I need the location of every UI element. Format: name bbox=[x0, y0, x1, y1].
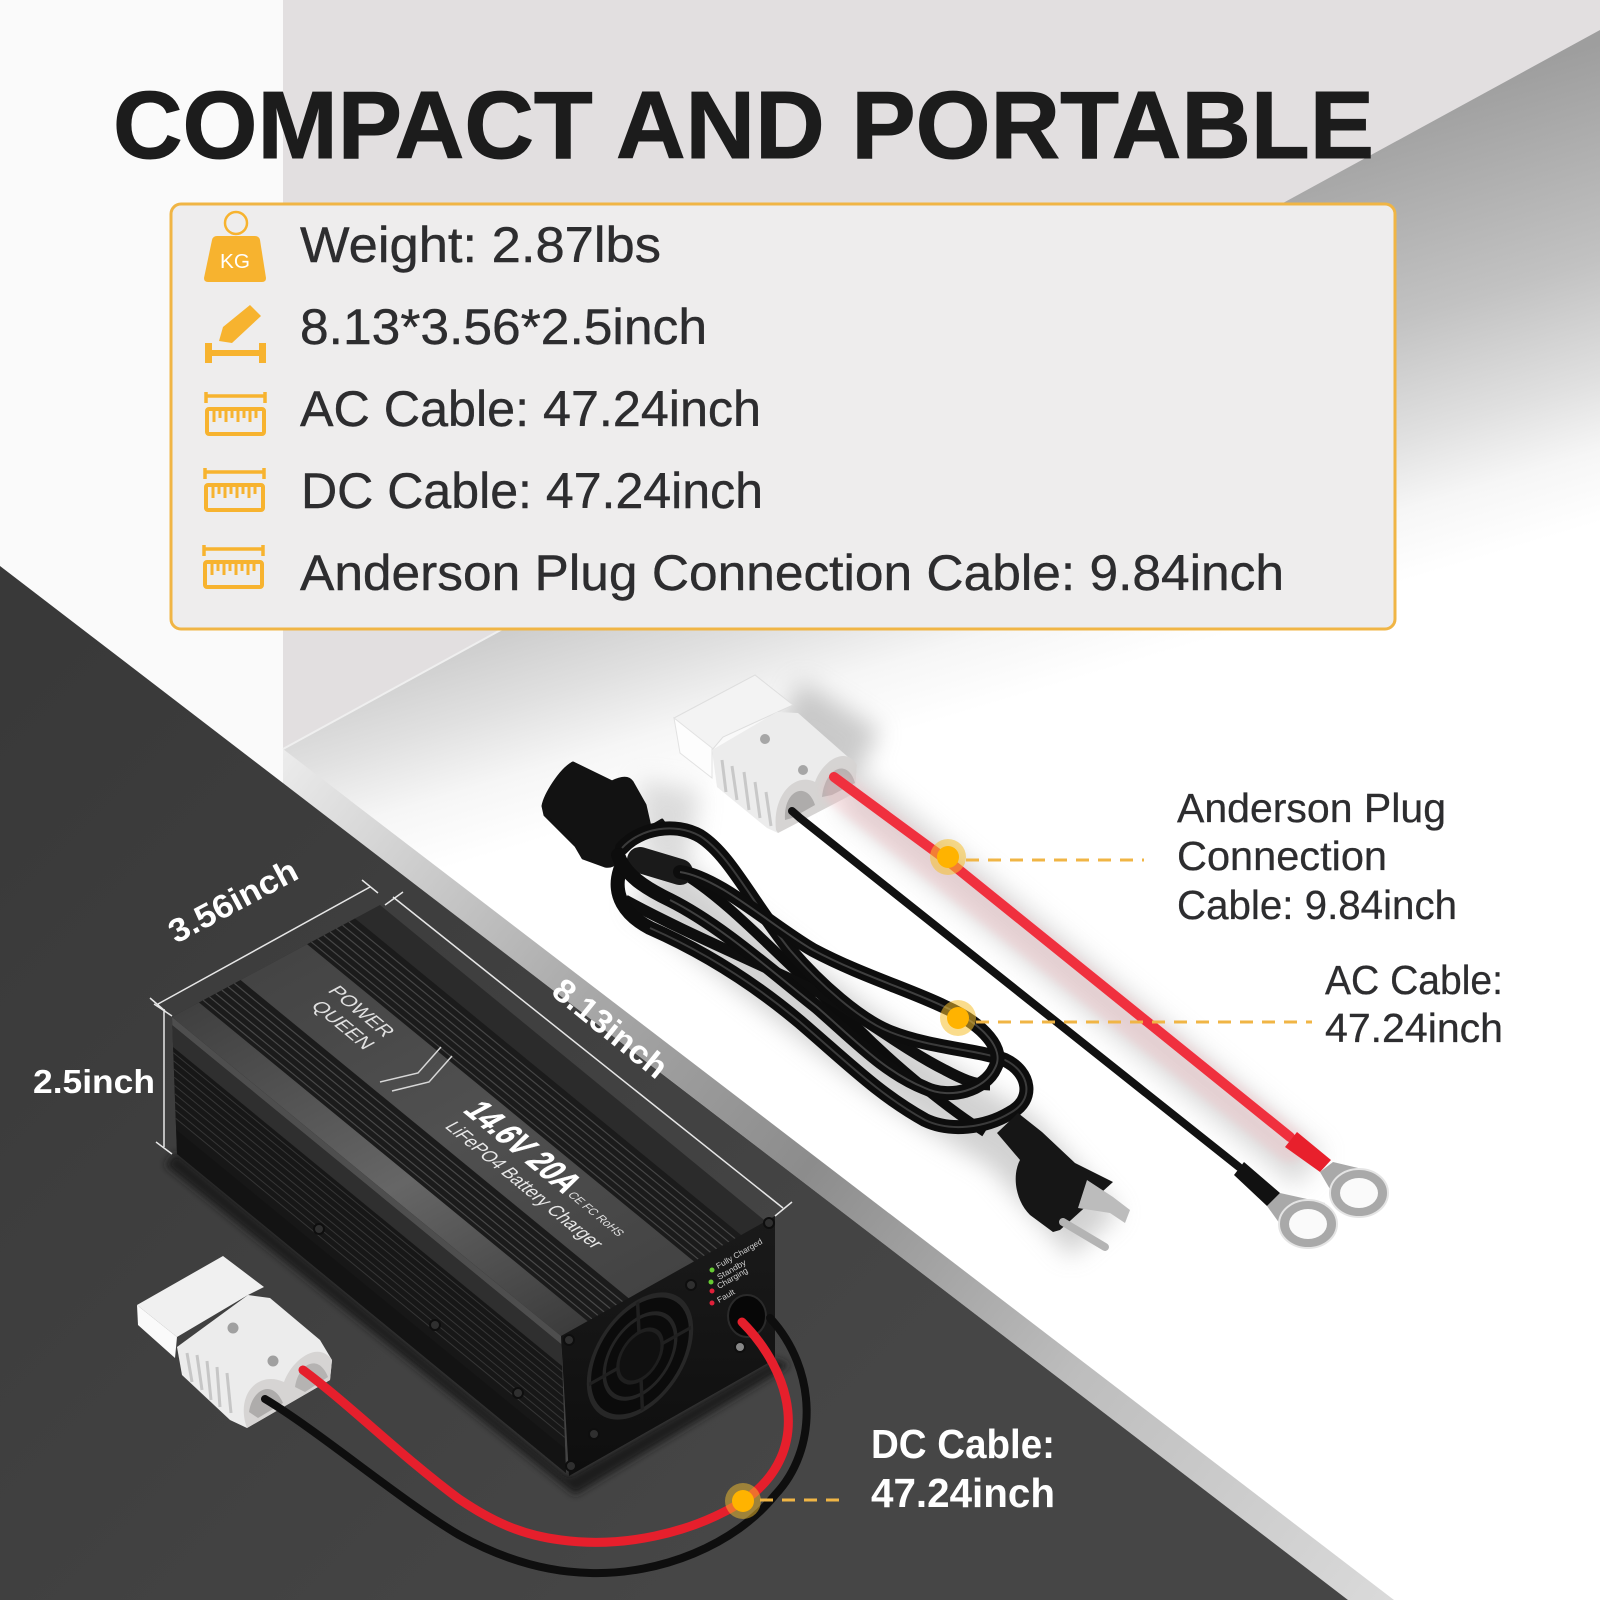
icon: ruler Anderson bbox=[204, 545, 263, 587]
logo bbox=[306, 983, 399, 1053]
callout: Anderson cable: Cable: 9.84inch bbox=[1177, 882, 1457, 928]
outer loop bbox=[618, 828, 1026, 1127]
logo: POWER bbox=[323, 983, 399, 1040]
screws bbox=[314, 1218, 774, 1471]
IEC plug bbox=[543, 763, 667, 866]
model text: 14.6V 20A bbox=[455, 1095, 592, 1198]
AC power cord bbox=[543, 763, 1130, 1247]
background: grey wall bbox=[283, 0, 1600, 800]
dimension: length line bbox=[385, 892, 792, 1216]
wires: Anderson connection cable bbox=[792, 777, 1290, 1167]
text: DC cable: DC Cable: 47.24inch bbox=[301, 463, 763, 519]
connector: bottom Anderson plug bbox=[137, 1256, 332, 1428]
text: AC cable: AC Cable: 47.24inch bbox=[300, 381, 761, 437]
callout: AC cable: 47.24inch bbox=[1325, 1005, 1503, 1051]
label: length: 8.13inch bbox=[546, 971, 675, 1086]
chevron marks bbox=[380, 1047, 452, 1091]
NEMA plug body bbox=[997, 1113, 1113, 1232]
label: width: 3.56inch bbox=[162, 851, 304, 950]
callout: Anderson cable: Connection bbox=[1177, 833, 1387, 879]
icon: weight bbox=[204, 212, 266, 282]
icon: dimensions pencil bbox=[205, 305, 266, 363]
LED labels: Fully Charged bbox=[714, 1237, 764, 1271]
LED labels: Fault bbox=[716, 1287, 737, 1305]
flat prongs bbox=[1078, 1180, 1130, 1223]
strain relief bbox=[640, 860, 680, 872]
charger front face bbox=[561, 1216, 775, 1476]
terminal: black ring bbox=[1234, 1162, 1337, 1248]
pink glow around red wire bbox=[840, 790, 1290, 1145]
wires: DC cable bbox=[265, 1318, 807, 1573]
DC black wire bbox=[265, 1318, 807, 1573]
text: Anderson cable: Anderson Plug Connection Cable: 9.84inch bbox=[300, 545, 1284, 601]
inner loop bbox=[618, 855, 998, 1093]
callout: DC cable: DC Cable: bbox=[871, 1421, 1055, 1467]
black wire bbox=[792, 811, 1239, 1167]
dimension: height line bbox=[154, 1004, 172, 1154]
DC red wire bbox=[303, 1322, 788, 1542]
grommet bbox=[728, 1295, 766, 1337]
charger shadow bbox=[165, 1152, 790, 1495]
label: height: 2.5inch bbox=[33, 1063, 155, 1100]
cooling fan bbox=[587, 1274, 693, 1438]
background: dark floor bbox=[0, 566, 1348, 1600]
charger side face bbox=[172, 1017, 566, 1473]
callout: Anderson cable bbox=[930, 785, 1457, 928]
under strand bbox=[680, 872, 985, 1132]
callout: AC cable: AC Cable: bbox=[1325, 957, 1503, 1003]
logo: QUEEN bbox=[306, 998, 379, 1053]
callout: DC cable bbox=[725, 1421, 1055, 1519]
icon: ruler DC bbox=[205, 468, 264, 510]
LED labels: Standby bbox=[716, 1258, 748, 1282]
panel: specifications bbox=[171, 204, 1395, 629]
text: weight: Weight: 2.87lbs bbox=[300, 217, 661, 273]
callout: Anderson cable: Anderson Plug bbox=[1177, 785, 1446, 831]
extra strand bbox=[625, 900, 990, 1085]
LED labels: Charging bbox=[716, 1266, 749, 1291]
red wire bbox=[834, 777, 1290, 1137]
product text: LiFePO4 Battery Charger bbox=[440, 1119, 608, 1252]
status LEDs bbox=[708, 1268, 714, 1306]
ground pin bbox=[1063, 1222, 1105, 1247]
title: COMPACT AND PORTABLE bbox=[113, 72, 1374, 179]
callout: AC cable bbox=[940, 957, 1503, 1051]
panel background bbox=[171, 204, 1395, 629]
text: dimensions: 8.13*3.56*2.5inch bbox=[300, 299, 707, 355]
charger top face bbox=[172, 905, 769, 1336]
dimension: width line bbox=[150, 880, 378, 1011]
icon: ruler AC bbox=[206, 392, 265, 434]
connector: top Anderson plug bbox=[674, 675, 857, 833]
LED labels bbox=[714, 1237, 764, 1305]
certification text: CE FC RoHS bbox=[564, 1190, 628, 1238]
icon: weight: KG bbox=[220, 251, 250, 273]
callout: DC cable: 47.24inch bbox=[871, 1470, 1055, 1516]
shadows under top-right cables bbox=[640, 680, 1310, 1235]
background: shelf front bevel bbox=[283, 749, 1394, 1600]
terminal: red ring bbox=[1285, 1132, 1388, 1217]
charger bbox=[172, 905, 775, 1476]
